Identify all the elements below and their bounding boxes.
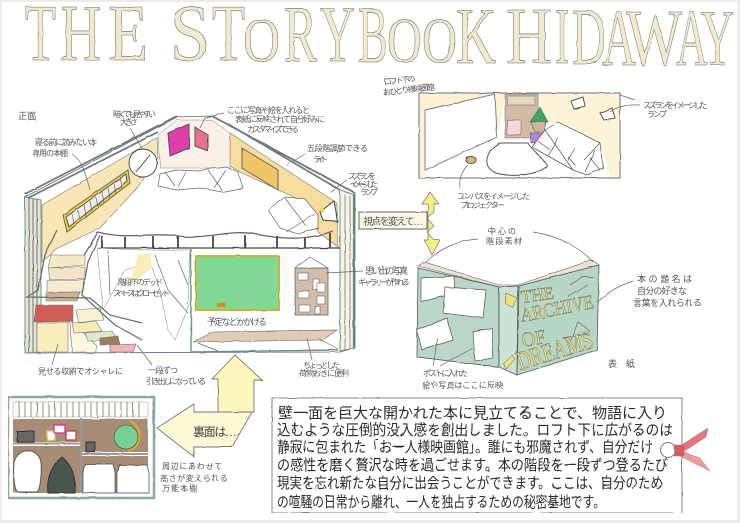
small ornament [86,442,95,452]
cover title: ARCHIVE [519,291,596,327]
room annotations: 見せる収納でオシャレに [38,366,123,376]
book annotations: 表紙 [608,358,635,369]
projector [466,156,476,164]
book annotations: 本の題名は [637,273,692,284]
room annotations: 専用の本棚 [32,148,68,158]
loft caption [381,73,435,97]
room annotations: スペースはクローゼット [113,288,170,298]
white backpack [14,451,41,492]
constellations [562,276,595,342]
title: O [243,7,280,75]
book annotations: 階段素材 [486,236,522,246]
lower wall [191,248,338,352]
room shell [25,116,355,353]
bed pillows [158,167,318,234]
back cover [417,268,499,367]
loft caption: ロフト下の [383,75,416,87]
room annotations: 表紙に反映されて自分好みに [235,114,325,124]
room annotations: ランプ [360,188,378,197]
sofa [532,122,603,175]
wall colour [420,94,505,178]
book pages [418,260,599,287]
storage boxes [83,464,149,493]
book annotations: 絵や写真はここに反映 [422,380,503,390]
room annotations: 五段階調節できる [307,143,368,153]
lamp [320,201,338,222]
left yellow wall [42,138,158,262]
shelf backs [13,419,148,493]
shelf caption: 高さが変えられる [160,473,228,483]
panel: loft cinema [419,93,620,178]
book annotations: 中心の [488,226,516,236]
arrow: change viewpoint [359,192,440,255]
title [25,0,734,83]
panel: description: の感性を磨く贅沢な時を過ごせます。本の階段を一段ずつ登るたび [277,456,668,474]
book annotations: ポストに入れた [423,369,468,378]
loft annotations: ランプ [647,110,667,119]
photo frames [47,425,76,440]
page arc lines [426,232,593,262]
loft annotations [457,95,707,210]
panel: description: の喧騒の日常から離れ、一人を独占するための秘密基地です。 [277,494,605,511]
front cover [517,265,599,375]
green board [196,256,279,310]
room annotations: 引き出しになっている [146,376,206,386]
room annotations: ギャラリーが作れる [358,277,410,287]
room annotations: ちょっとした [303,361,340,370]
spine [499,286,518,375]
arrow: back side [157,355,262,457]
camera [17,431,34,442]
stair rope [27,230,142,340]
panel: description [272,398,682,513]
arrow: back side: 裏面は… [193,425,237,439]
cover title: DREAMS [513,325,596,376]
panel: description: 壁一面を巨大な開かれた本に見立てることで、物語に入り [278,405,667,422]
loft annotations: コンパスをイメージした [457,192,530,201]
label: front view: 正面 [18,111,36,121]
loft annotations: プロジェクター [460,201,505,210]
lamp left [571,97,585,109]
room annotations: 予定などかかける [207,317,267,327]
title: O [422,5,457,76]
room annotations [32,105,410,386]
room annotations: イメージした [350,180,378,189]
room annotations: 荷物おきに便利 [299,368,349,378]
book annotations [422,226,702,390]
room annotations: スズランを [348,171,376,181]
title: O [387,5,422,76]
loft rail [80,231,340,262]
stairs [34,255,136,352]
pasted photos [417,276,493,361]
book annotations: 言葉を入れられる [633,297,702,308]
cover title [513,283,596,376]
book row [13,402,148,417]
shelf caption: 万能本棚 [162,483,197,493]
loft caption: おひとり様映画館 [382,82,435,97]
shelf caption: 周辺にあわせて [162,462,222,471]
projection screen [425,94,497,170]
globe [114,421,140,451]
arrow: change viewpoint: 視点を変えて… [363,215,423,228]
panel: description: 込むような圧倒的没入感を創出しました。ロフト下に広がるのは [277,422,673,439]
photo gallery board [295,257,328,315]
right book edge [212,116,355,351]
room annotations: ライト [313,155,328,164]
room annotations: 寝る前に読みたい本 [35,137,97,147]
panel: description: 静寂に包まれた「お一人様映画館」。誰にも邪魔されず、自分だけ [277,439,653,456]
lamp right [600,108,615,120]
room annotations: 階段下のデッド [118,277,163,287]
picture frame left [168,124,189,156]
room annotations: カスタマイズできる [247,124,299,134]
cover title: OF [520,326,548,352]
clock [129,149,157,177]
left book edge [25,116,177,353]
bench [193,330,338,351]
shelf boards [13,418,148,493]
room annotations: 思い出の写真 [365,265,408,276]
room annotations: 大きさ [120,117,138,127]
panel: book cover [417,232,599,376]
wall window [242,148,278,190]
spine icons [505,293,517,307]
panel: back shelf [8,397,154,498]
panel: description: 現実を忘れ新たな自分に出会うことができます。ここは、自分のため [277,475,663,492]
bookshelf [63,170,130,232]
plant [530,107,548,143]
main room illustration [25,116,355,353]
cover title: THE [520,283,555,307]
loft annotations: スズランをイメージした [643,100,707,110]
room annotations: ここに写真や絵を入れると [227,105,310,115]
back attic wall [158,120,230,168]
dark backpack [48,457,75,493]
room annotations: 一段ずつ [148,365,178,375]
icon: ribbon bookmark [660,428,710,471]
curtain [97,248,190,340]
right yellow wall [230,133,338,247]
room annotations: 暗くても見やすい [113,110,156,119]
picture frame right [195,127,208,151]
shelf caption [160,462,228,493]
shelf in back [505,94,538,138]
rug [487,143,547,175]
book annotations: 自分の好きな [637,285,687,296]
